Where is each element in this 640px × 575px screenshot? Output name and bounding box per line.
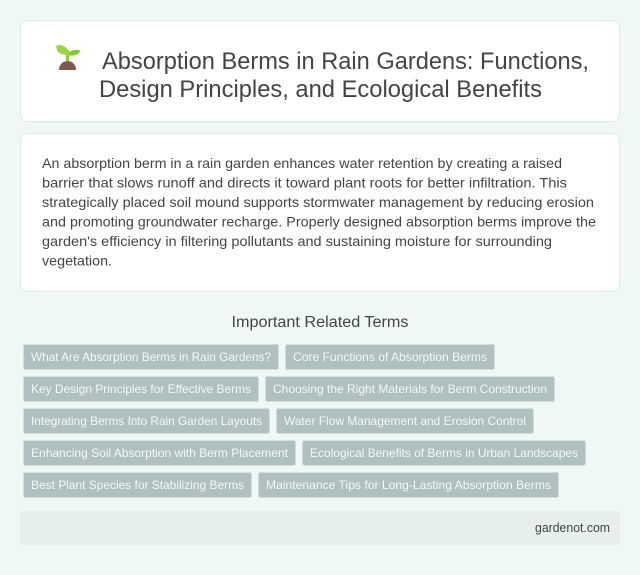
summary text: vegetation.: [42, 252, 112, 268]
panel: title card: [20, 20, 620, 122]
summary text: and promoting groundwater recharge. Properly designed absorption berms improve the: [42, 214, 596, 230]
tag 3: Key Design Principles for Effective Berms: [31, 382, 251, 396]
title: Design Principles, and Ecological Benefits: [99, 76, 542, 103]
summary text: strategically placed soil mound supports stormwater management by reducing erosion: [42, 194, 594, 210]
summary text: [42, 155, 596, 268]
tag 8: Ecological Benefits of Berms in Urban Landscapes: [310, 446, 578, 460]
tag 2: [286, 344, 494, 370]
heading: related terms: Important Related Terms: [232, 314, 409, 331]
tag 6: [276, 408, 534, 434]
title: [99, 48, 589, 103]
tag 6: Water Flow Management and Erosion Control: [284, 414, 526, 428]
summary text: barrier that slows runoff and directs it toward plant roots for better infiltration. This: [42, 174, 567, 190]
tag 5: Integrating Berms Into Rain Garden Layouts: [31, 414, 262, 428]
tag 5: [24, 408, 270, 434]
tag 7: [24, 440, 296, 466]
footer: gardenot.com: [535, 521, 610, 535]
tag 1: [24, 344, 278, 370]
footer: [20, 511, 620, 545]
tag 10: [258, 472, 558, 498]
tag 3: [24, 376, 258, 402]
icon: seedling: [56, 45, 80, 70]
tag 4: Choosing the Right Materials for Berm Construction: [273, 382, 547, 396]
summary text: garden's efficiency in filtering pollutants and sustaining moisture for surrounding: [42, 233, 552, 249]
term tags: [24, 344, 586, 498]
tag 2: Core Functions of Absorption Berms: [293, 350, 487, 364]
tag 9: Best Plant Species for Stabilizing Berms: [31, 478, 244, 492]
tag 9: [24, 472, 252, 498]
tag 10: Maintenance Tips for Long-Lasting Absorption Berms: [266, 478, 551, 492]
tag 8: [302, 440, 586, 466]
summary text: An absorption berm in a rain garden enhances water retention by creating a raised: [42, 155, 562, 171]
tag 4: [266, 376, 554, 402]
panel: summary: [20, 134, 620, 292]
tag 7: Enhancing Soil Absorption with Berm Placement: [31, 446, 289, 460]
tag 1: What Are Absorption Berms in Rain Gardens?: [31, 350, 271, 364]
title: Absorption Berms in Rain Gardens: Functions,: [102, 48, 589, 75]
